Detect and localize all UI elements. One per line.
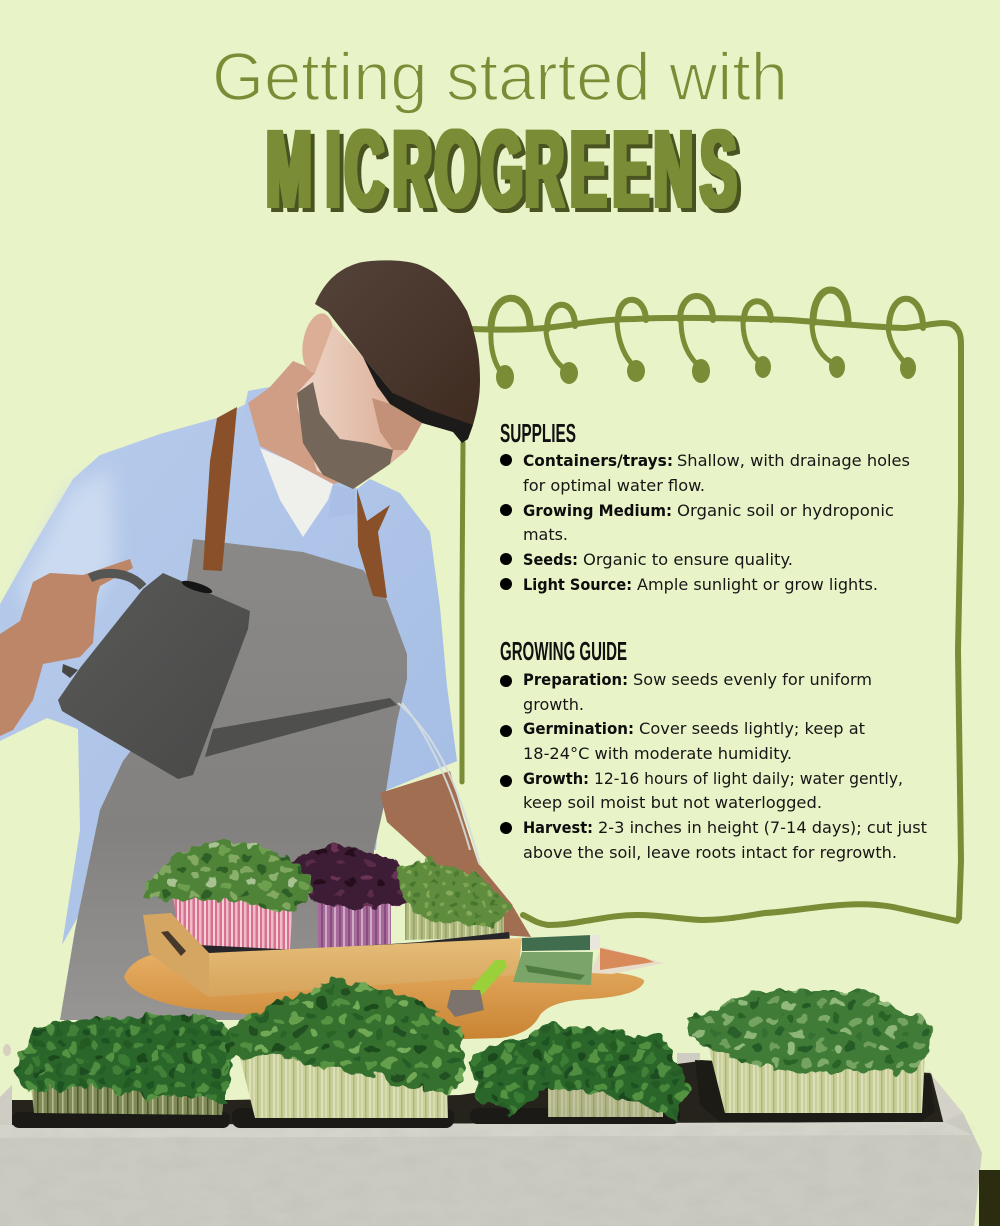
microgreens tray 3 xyxy=(469,1023,689,1124)
bullet list: supplies: Shallow, with drainage holes xyxy=(677,451,910,470)
neck xyxy=(248,361,350,484)
ear xyxy=(298,311,338,375)
bamboo tray side xyxy=(143,913,209,997)
planter left rim xyxy=(0,1085,12,1140)
bullet list: supplies: Containers/trays: xyxy=(523,451,673,470)
cap visor xyxy=(363,357,473,443)
left apron strap xyxy=(203,407,237,571)
seed packets xyxy=(513,935,664,985)
bullet list: growing guide: Germination: xyxy=(523,719,634,738)
watering can xyxy=(58,573,397,779)
bullet list: growing guide xyxy=(500,670,927,862)
bullet list: growing guide: keep soil moist but not waterlogged. xyxy=(523,793,822,812)
notebook frame with spiral rings xyxy=(462,290,961,925)
inner dark cavity xyxy=(10,1060,947,1128)
panel: growing guide xyxy=(500,636,927,862)
beard xyxy=(297,382,393,489)
bullet list: growing guide: Sow seeds evenly for uniform xyxy=(633,670,872,689)
bullet list: supplies: Light Source: xyxy=(523,575,632,594)
sleeve highlight xyxy=(20,470,115,620)
garden trowel xyxy=(447,960,507,1017)
face shadow under cap xyxy=(372,398,422,450)
title: getting started with: Getting started with xyxy=(212,39,788,115)
shirt xyxy=(0,387,457,945)
forearm and hand xyxy=(0,559,133,736)
green leaf microgreens xyxy=(142,840,315,913)
concrete body xyxy=(0,1113,982,1226)
small tray of microgreens xyxy=(142,840,522,997)
microgreens tray 2 xyxy=(223,980,465,1128)
bullet list: supplies: Organic to ensure quality. xyxy=(583,550,793,569)
panel: supplies xyxy=(500,418,910,594)
bullet list: growing guide: growth. xyxy=(523,695,584,714)
cap xyxy=(315,260,480,425)
heading: growing guide: GROWING GUIDE xyxy=(500,636,627,666)
concrete rim highlight xyxy=(0,1122,972,1138)
title: microgreens: MICROGREENS xyxy=(266,108,737,231)
dark corner block xyxy=(979,1170,1000,1226)
bullet list: supplies: Ample sunlight or grow lights. xyxy=(637,575,878,594)
bullet list: growing guide: 18-24°C with moderate humidity. xyxy=(523,744,792,763)
tray handle hole xyxy=(161,931,186,956)
man with watering can xyxy=(0,260,531,1020)
pink radish stems xyxy=(173,895,293,952)
bullet list: growing guide: Cover seeds lightly; keep at xyxy=(639,719,865,738)
microgreens tray 1 xyxy=(12,1015,236,1128)
wooden board xyxy=(124,955,644,1039)
bullet list: growing guide: 12-16 hours of light daily; water gently, xyxy=(594,769,903,788)
purple stems xyxy=(318,900,391,948)
green herb microgreens xyxy=(395,858,513,927)
purple microgreens xyxy=(291,843,416,910)
herb stems xyxy=(405,900,504,940)
planter box xyxy=(0,1053,1000,1226)
bamboo tray front xyxy=(209,938,522,997)
right forearm xyxy=(380,771,531,937)
bullet list: growing guide: Preparation: xyxy=(523,670,628,689)
black inner pots xyxy=(198,932,510,958)
bullet list: supplies: for optimal water flow. xyxy=(523,476,705,495)
stray leaf xyxy=(3,1044,11,1056)
planter right rim xyxy=(925,1067,982,1153)
bullet list: supplies: mats. xyxy=(523,525,568,544)
bullet list: growing guide: Growth: xyxy=(523,769,589,788)
bullet list: growing guide: Harvest: xyxy=(523,818,593,837)
microgreens tray 4 xyxy=(689,990,937,1122)
water stream xyxy=(398,703,480,865)
bullet list: supplies: Seeds: xyxy=(523,550,578,569)
t-shirt xyxy=(260,448,333,537)
heading: supplies: SUPPLIES xyxy=(500,418,576,448)
bullet list: supplies: Organic soil or hydroponic xyxy=(677,501,894,520)
bullet list: supplies xyxy=(500,451,910,594)
bullet list: supplies: Growing Medium: xyxy=(523,501,672,520)
face xyxy=(297,325,422,489)
left shirt collar xyxy=(227,387,277,500)
planter back rim xyxy=(677,1053,700,1064)
concrete texture xyxy=(0,1125,975,1226)
right apron strap xyxy=(357,489,390,598)
apron xyxy=(60,539,407,1020)
bullet list: growing guide: 2-3 inches in height (7-14 days); cut just xyxy=(598,818,927,837)
bullet list: growing guide: above the soil, leave roots intact for regrowth. xyxy=(523,843,897,862)
right shirt collar xyxy=(328,486,355,518)
